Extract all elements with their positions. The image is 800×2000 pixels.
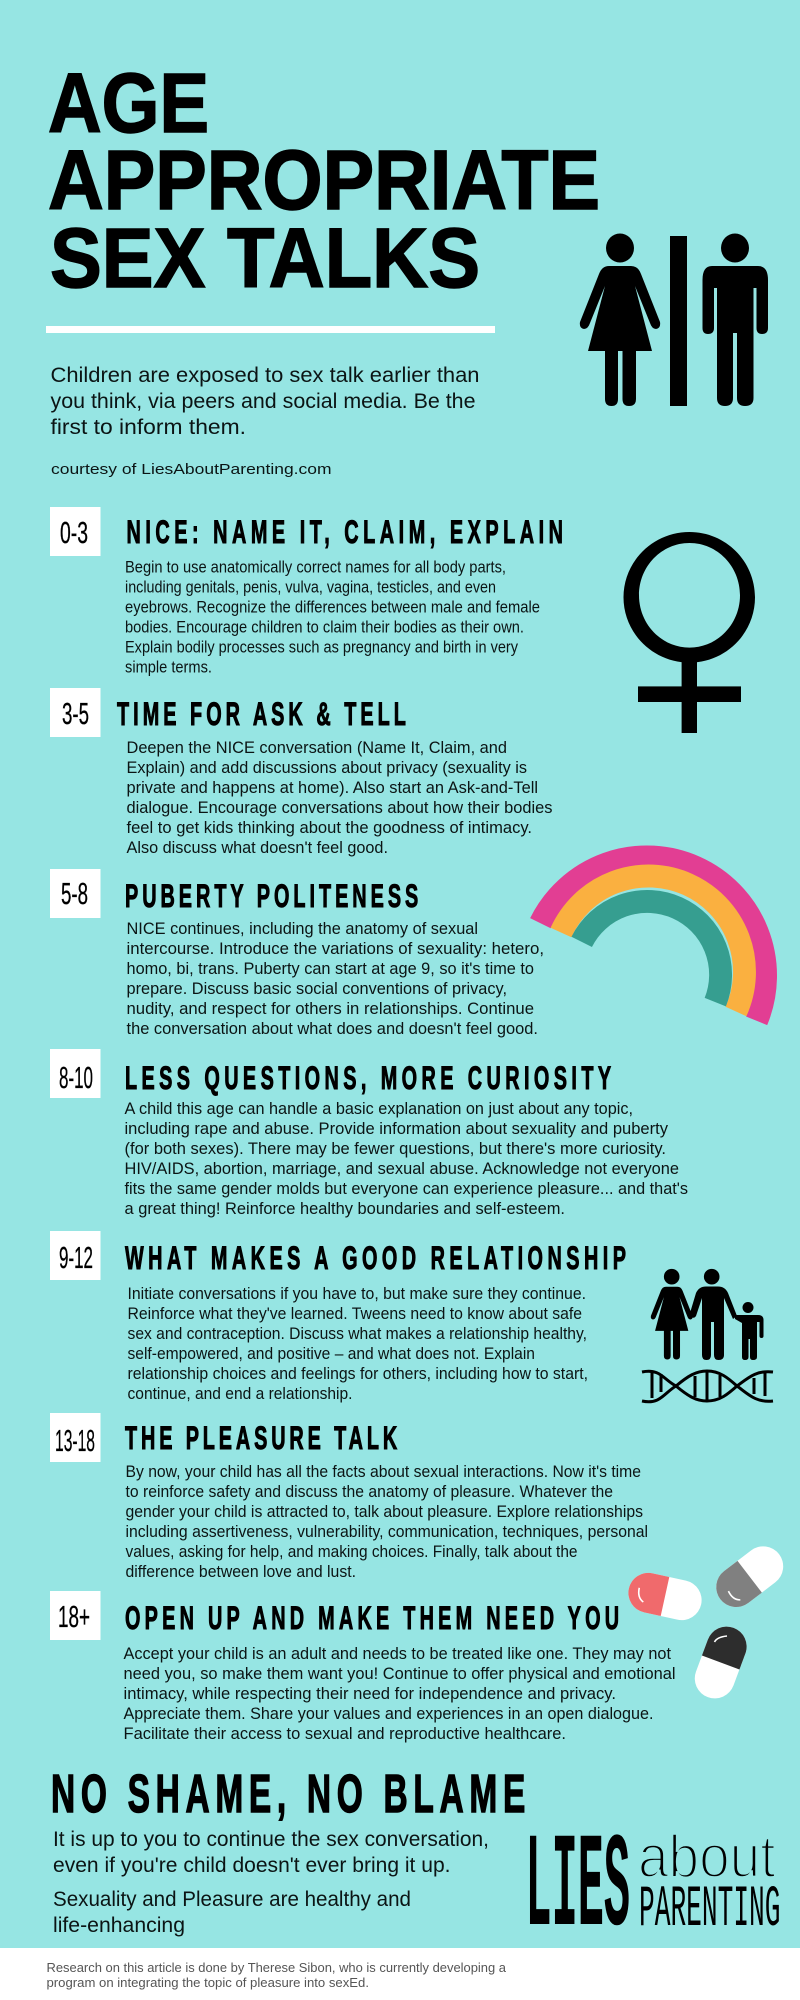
closing text bbox=[53, 1828, 489, 1937]
age badge 5-8: 5-8 bbox=[61, 876, 88, 911]
body text: Explain bodily processes such as pregnancy and birth in very bbox=[125, 638, 519, 656]
footer credit text bbox=[46, 1961, 506, 1990]
body text: Deepen the NICE conversation (Name It, Claim, and bbox=[126, 739, 507, 757]
body text: (for both sexes). There may be fewer questions, but there's more curiosity. bbox=[124, 1140, 666, 1158]
heading: WHAT MAKES A GOOD RELATIONSHIP bbox=[125, 1240, 626, 1276]
panel: ages 5-8 bbox=[50, 869, 544, 1038]
body text: simple terms. bbox=[125, 658, 212, 676]
age badge 8-10 bbox=[50, 1049, 100, 1098]
closing text: even if you're child doesn't ever bring it up. bbox=[53, 1854, 450, 1877]
age badge 18+ bbox=[50, 1591, 100, 1640]
body text: Initiate conversations if you have to, but make sure they continue. bbox=[128, 1285, 586, 1303]
body text: to reinforce safety and discuss the anatomy of pleasure. Whatever the bbox=[126, 1483, 613, 1501]
panel: ages 8-10 bbox=[50, 1049, 688, 1218]
title: APPROPRIATE bbox=[48, 133, 600, 227]
panel: ages 18+ bbox=[50, 1591, 676, 1743]
body text bbox=[126, 739, 552, 857]
footer credit text: Research on this article is done by Therese Sibon, who is currently developing a bbox=[46, 1961, 506, 1975]
body text: Appreciate them. Share your values and experiences in an open dialogue. bbox=[124, 1705, 654, 1723]
intro text: first to inform them. bbox=[50, 416, 246, 439]
body text: sex and contraception. Discuss what makes a relationship healthy, bbox=[128, 1325, 587, 1343]
body text: private and happens at home). Also start an Ask-and-Tell bbox=[126, 779, 538, 797]
body text: Also discuss what doesn't feel good. bbox=[126, 839, 388, 857]
age badge 3-5: 3-5 bbox=[62, 696, 89, 731]
intro text: Children are exposed to sex talk earlier than bbox=[50, 364, 480, 387]
body text: By now, your child has all the facts about sexual interactions. Now it's time bbox=[126, 1463, 641, 1481]
age badge 8-10: 8-10 bbox=[59, 1060, 93, 1095]
body text: relationship choices and feelings for others, including how to start, bbox=[128, 1365, 588, 1383]
age badge 13-18 bbox=[50, 1413, 100, 1462]
heading: OPEN UP AND MAKE THEM NEED YOU bbox=[125, 1600, 619, 1636]
body text: Begin to use anatomically correct names for all body parts, bbox=[125, 558, 506, 576]
footer credit text: program on integrating the topic of pleasure into sexEd. bbox=[46, 1976, 369, 1990]
body text: including assertiveness, vulnerability, communication, techniques, personal bbox=[126, 1523, 648, 1541]
title bbox=[48, 56, 600, 305]
heading: THE PLEASURE TALK bbox=[125, 1420, 397, 1456]
body text bbox=[126, 920, 544, 1038]
body text: HIV/AIDS, abortion, marriage, and sexual abuse. Acknowledge not everyone bbox=[124, 1160, 679, 1178]
age badge 3-5 bbox=[50, 688, 100, 737]
body text: Reinforce what they've learned. Tweens need to know about safe bbox=[128, 1305, 582, 1323]
age badge 9-12: 9-12 bbox=[59, 1240, 93, 1275]
closing text: life-enhancing bbox=[53, 1914, 185, 1937]
body text: eyebrows. Recognize the differences between male and female bbox=[125, 598, 540, 616]
title: AGE bbox=[48, 56, 209, 150]
closing text: Sexuality and Pleasure are healthy and bbox=[53, 1888, 411, 1911]
body text: intercourse. Introduce the variations of sexuality: hetero, bbox=[126, 940, 544, 958]
body text: values, asking for help, and making choices. Finally, talk about the bbox=[126, 1543, 578, 1561]
body text: need you, so make them want you! Continue to offer physical and emotional bbox=[124, 1665, 676, 1683]
DNA helix bbox=[642, 1371, 773, 1402]
body text: NICE continues, including the anatomy of sexual bbox=[126, 920, 478, 938]
footer panel bbox=[0, 1948, 800, 2000]
body text bbox=[128, 1285, 588, 1403]
intro text bbox=[50, 364, 480, 439]
body text: feel to get kids thinking about the goodness of intimacy. bbox=[126, 819, 532, 837]
white divider bar bbox=[46, 326, 495, 333]
body text: intimacy, while respecting their need for independence and privacy. bbox=[124, 1685, 616, 1703]
body text: difference between love and lust. bbox=[126, 1563, 356, 1581]
black pill bbox=[689, 1621, 752, 1704]
body text: gender your child is attracted to, talk about pleasure. Explore relationships bbox=[126, 1503, 643, 1521]
age badge 0-3: 0-3 bbox=[60, 515, 88, 550]
body text: a great thing! Reinforce healthy boundaries and self-esteem. bbox=[124, 1200, 565, 1218]
grey pill bbox=[708, 1538, 791, 1615]
red pill bbox=[625, 1569, 705, 1624]
heading: PUBERTY POLITENESS bbox=[125, 878, 418, 914]
age badge 9-12 bbox=[50, 1231, 100, 1280]
panel: ages 9-12 bbox=[50, 1231, 626, 1403]
body text: Explain) and add discussions about privacy (sexuality is bbox=[126, 759, 527, 777]
age badge 18+: 18+ bbox=[58, 1599, 90, 1634]
courtesy line: courtesy of LiesAboutParenting.com bbox=[51, 461, 332, 478]
logo: Lies about Parenting: about bbox=[638, 1823, 776, 1890]
closing heading: NO SHAME, NO BLAME bbox=[51, 1763, 525, 1824]
body text: nudity, and respect for others in relationships. Continue bbox=[126, 1000, 534, 1018]
black pill highlight bbox=[714, 1636, 727, 1642]
body text bbox=[124, 1100, 688, 1218]
intro text: you think, via peers and social media. Be the bbox=[50, 390, 476, 413]
panel: ages 0-3 bbox=[50, 507, 563, 676]
body text: the conversation about what does and doesn't feel good. bbox=[126, 1020, 538, 1038]
icon: restroom woman and man bbox=[580, 234, 768, 406]
body text: bodies. Encourage children to claim their bodies as their own. bbox=[125, 618, 524, 636]
body text: A child this age can handle a basic explanation on just about any topic, bbox=[124, 1100, 633, 1118]
family figures bbox=[651, 1269, 764, 1360]
icon: family and DNA bbox=[642, 1269, 773, 1402]
body text: Facilitate their access to sexual and reproductive healthcare. bbox=[124, 1725, 566, 1743]
body text: self-empowered, and positive – and what does not. Explain bbox=[128, 1345, 535, 1363]
body text bbox=[126, 1463, 648, 1581]
body text: including rape and abuse. Provide information about sexuality and puberty bbox=[124, 1120, 669, 1138]
heading: NICE: NAME IT, CLAIM, EXPLAIN bbox=[126, 514, 563, 550]
panel: ages 3-5 bbox=[50, 688, 552, 857]
body text: homo, bi, trans. Puberty can start at age 9, so it's time to bbox=[126, 960, 534, 978]
title: SEX TALKS bbox=[50, 211, 480, 305]
age badge 13-18: 13-18 bbox=[55, 1423, 95, 1458]
icon: female symbol bbox=[624, 532, 755, 733]
body text bbox=[125, 558, 540, 676]
body text: including genitals, penis, vulva, vagina, testicles, and even bbox=[125, 578, 496, 596]
body text: fits the same gender molds but everyone can experience pleasure... and that's bbox=[124, 1180, 688, 1198]
body text: prepare. Discuss basic social conventions of privacy, bbox=[126, 980, 507, 998]
panel: ages 13-18 bbox=[50, 1413, 648, 1581]
body text: dialogue. Encourage conversations about how their bodies bbox=[126, 799, 552, 817]
closing text: It is up to you to continue the sex conversation, bbox=[53, 1828, 489, 1851]
body text bbox=[124, 1645, 676, 1743]
icon: rainbow bbox=[540, 857, 766, 1021]
body text: continue, and end a relationship. bbox=[128, 1385, 352, 1403]
body text: Accept your child is an adult and needs to be treated like one. They may not bbox=[124, 1645, 671, 1663]
age badge 0-3 bbox=[50, 507, 100, 556]
age badge 5-8 bbox=[50, 869, 100, 918]
icon: pills bbox=[625, 1538, 791, 1704]
heading: TIME FOR ASK & TELL bbox=[117, 696, 406, 732]
heading: LESS QUESTIONS, MORE CURIOSITY bbox=[125, 1060, 611, 1096]
